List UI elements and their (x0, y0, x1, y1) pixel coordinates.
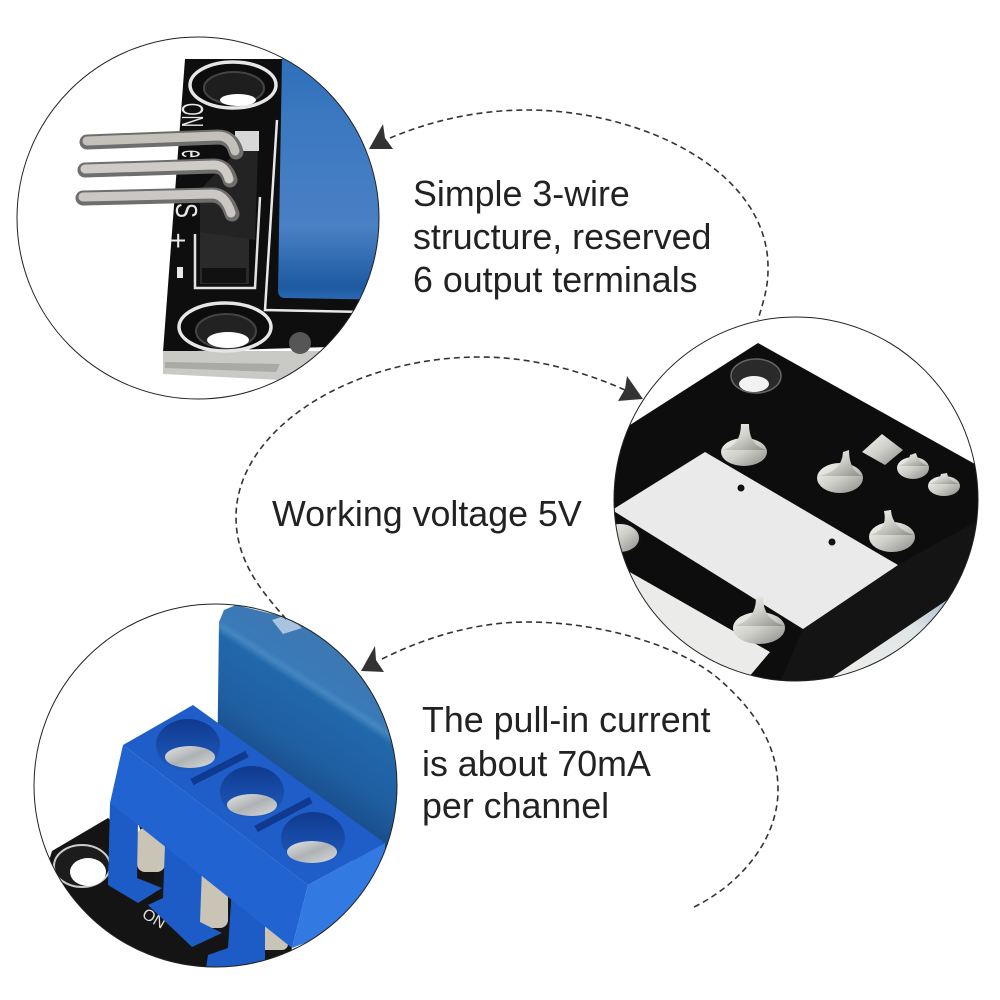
terminal block top (123, 705, 385, 885)
silkscreen labels: e (174, 150, 211, 158)
text: 3-wire structure: 6 output terminals (413, 260, 698, 300)
text: pull-in current: The pull-in current (422, 700, 711, 740)
PCB board (50, 818, 268, 966)
text: 3-wire structure: structure, reserved (413, 217, 711, 257)
silkscreen label: ON (139, 906, 168, 932)
text: pull-in current: is about 70mA (422, 744, 651, 784)
text: 3-wire structure: Simple 3-wire (413, 174, 630, 214)
block slots (192, 754, 311, 829)
silkscreen labels (171, 104, 204, 278)
silver terminals (137, 828, 288, 950)
text: pull-in current: per channel (422, 786, 609, 826)
top mounting hole (190, 62, 276, 108)
silkscreen labels: + (170, 225, 186, 256)
PCB board (163, 59, 360, 351)
lower white strip (630, 572, 770, 675)
panel: top-left photo circle of pin header (17, 37, 400, 399)
solder joints (600, 424, 960, 644)
PCB board (600, 343, 982, 682)
terminal block side (292, 843, 385, 948)
blue relay (218, 606, 396, 860)
lower right relay body (832, 600, 947, 677)
blue relay (278, 58, 378, 300)
silkscreen labels: ON (174, 103, 208, 127)
terminal cavity shadow (139, 826, 292, 954)
arrow: dashed curve to top-left circle (369, 110, 768, 320)
arrow: dashed curve to right circle (236, 357, 643, 620)
mounting hole (731, 359, 781, 393)
panel: bottom-left photo circle of screw terminal (34, 604, 398, 968)
solder dot (289, 332, 311, 354)
arrow: dashed curve to bottom-left circle (361, 622, 778, 908)
pins (83, 136, 236, 214)
lower PCB edge (780, 518, 982, 682)
panel: right photo circle of solder side (600, 317, 982, 684)
white label sticker (612, 452, 898, 629)
screw recesses (156, 719, 345, 864)
terminal legs (108, 803, 265, 975)
terminal block front (110, 745, 308, 948)
mounting hole (54, 845, 110, 887)
bottom mounting hole (179, 303, 271, 351)
silkscreen outlines (265, 120, 365, 312)
silkscreen labels: S (169, 203, 203, 218)
label holes (738, 484, 744, 492)
text: working voltage: Working voltage 5V (272, 494, 582, 534)
header socket block (200, 131, 259, 284)
relay print smudge (272, 617, 302, 634)
PCB silver edge (163, 351, 325, 381)
